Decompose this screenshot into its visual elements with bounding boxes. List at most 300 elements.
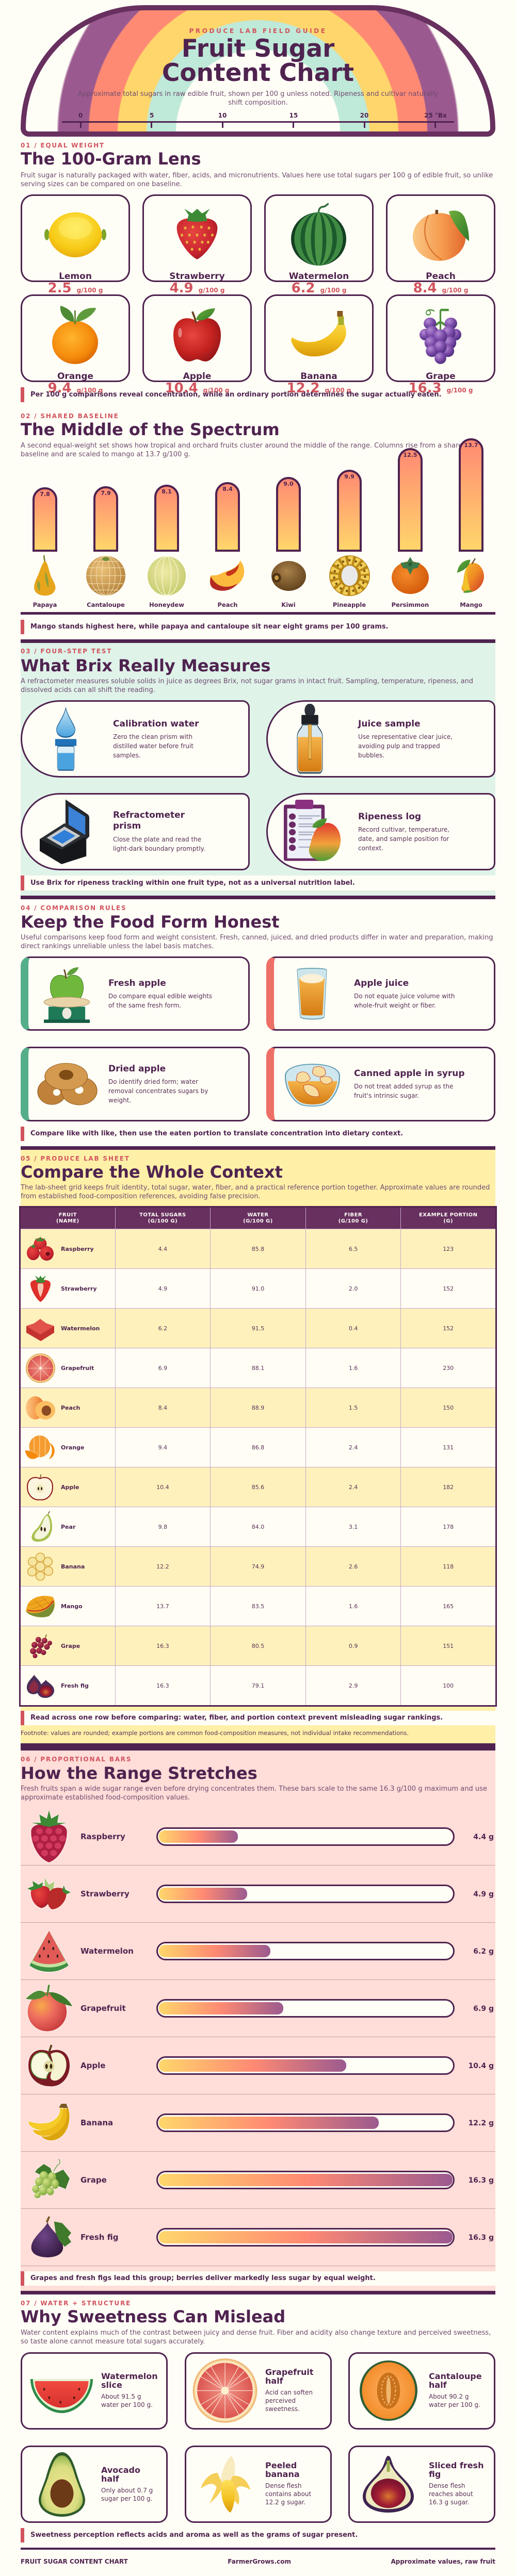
intro text: so taste alone cannot measure total sugars accurately. — [21, 2338, 205, 2346]
icon: strawberry half — [30, 1276, 51, 1302]
intro text — [21, 678, 473, 694]
label: cantaloupe: Cantaloupe — [87, 601, 125, 608]
hero subtitle — [78, 90, 438, 107]
data table: 9.8 — [158, 1523, 167, 1530]
column chart: 7.8 — [40, 491, 50, 498]
icon: persimmon — [392, 557, 429, 594]
bar row: strawberry — [21, 1865, 495, 1923]
data table: (G/100 G) — [243, 1218, 273, 1224]
step text — [358, 825, 449, 853]
label: Watermelon — [289, 271, 349, 282]
bar track — [156, 2228, 455, 2247]
icon: sliced fig — [363, 2456, 414, 2513]
icon: green grapes — [29, 2157, 70, 2198]
data table: 123 — [443, 1246, 454, 1252]
bar track — [156, 1827, 455, 1846]
bar row: watermelon — [21, 1923, 495, 1980]
card text: 16.3 g sugar. — [429, 2499, 469, 2506]
data table: Pear — [61, 1523, 75, 1530]
card: cantaloupe half — [348, 2352, 495, 2430]
label: honeydew: Honeydew — [149, 601, 184, 608]
data table: 178 — [443, 1523, 454, 1530]
column chart: 8.4 — [222, 486, 233, 492]
card title: banana — [265, 2469, 300, 2479]
fruit name: Strawberry — [80, 1889, 130, 1898]
callout: Compare like with like, then use the eaten portion to translate concentration into dietary context. — [30, 1130, 403, 1137]
fruit name: Banana — [80, 2118, 113, 2127]
value: 10.4 g — [469, 2062, 494, 2070]
icon: watermelon — [291, 203, 346, 266]
card text: contains about — [265, 2490, 311, 2498]
data table: 85.6 — [252, 1484, 264, 1490]
bar fill — [159, 1830, 238, 1843]
intro text: The lab-sheet grid keeps fruit identity, total sugar, water, fiber, and a practical reference portion together. Approximate values are rounded — [21, 1184, 490, 1192]
intro text — [21, 1183, 490, 1201]
bar fill — [159, 1945, 270, 1957]
section 4: keep the food form honest — [21, 899, 495, 1146]
data table: 6.2 — [158, 1325, 167, 1331]
section 2: the middle of the spectrum — [21, 412, 495, 634]
section eyebrow: 06 / PROPORTIONAL BARS — [21, 1756, 132, 1763]
icon: water drop and vial — [55, 706, 76, 771]
intro text: A refractometer measures soluble solids in juice as degrees Brix, not sugar grams in intact fruit. Sampling, temperature, ripeness, and — [21, 678, 473, 685]
data table: 100 — [443, 1682, 454, 1689]
step text: context. — [358, 845, 383, 852]
section eyebrow: 02 / SHARED BASELINE — [21, 412, 119, 420]
rule text — [354, 1082, 453, 1100]
callout — [21, 2528, 495, 2542]
section eyebrow: 04 / COMPARISON RULES — [21, 904, 126, 912]
card: banana — [264, 294, 374, 382]
fruit name: Grapefruit — [80, 2004, 126, 2013]
intro text — [21, 172, 493, 188]
rule text: Do identify dried form; water — [108, 1078, 198, 1085]
label: mango: Mango — [460, 601, 482, 608]
card text: reaches about — [429, 2490, 473, 2498]
card text — [101, 2392, 153, 2409]
card: fresh apple — [21, 956, 250, 1031]
card text: sweetness. — [265, 2405, 300, 2413]
section 3: what brix really measures — [21, 643, 495, 896]
step text — [358, 733, 453, 759]
icon: grapefruit — [26, 1984, 72, 2033]
step title: Ripeness log — [358, 812, 421, 822]
intro text — [21, 933, 493, 951]
intro text: dissolved acids can all shift the reading. — [21, 686, 155, 694]
data table: 6.9 — [158, 1364, 167, 1372]
icon: fig — [30, 2215, 71, 2259]
label: Peach — [426, 271, 456, 282]
heading: The Middle of the Spectrum — [21, 420, 280, 439]
card title: fig — [429, 2469, 441, 2479]
card text — [429, 2482, 473, 2506]
data table: 85.8 — [252, 1246, 264, 1252]
heading: How the Range Stretches — [21, 1763, 257, 1783]
fruit name: Grape — [80, 2175, 107, 2185]
card title: half — [265, 2376, 283, 2386]
value: 8.4 g/100 g — [413, 280, 468, 296]
step title: Calibration water — [113, 719, 199, 729]
data table: (NAME) — [56, 1218, 79, 1224]
hero subtitle: Approximate total sugars in raw edible fruit, shown per 100 g unless noted. Ripeness and cultivar naturally — [78, 90, 438, 98]
icon: peeled orange — [25, 1435, 56, 1460]
rule text: weight. — [108, 1097, 131, 1104]
step text: light-dark boundary promptly. — [113, 845, 205, 852]
step title: prism — [113, 821, 141, 831]
bar row: fresh fig — [21, 2209, 495, 2266]
step title — [113, 810, 185, 831]
footer — [21, 2557, 495, 2566]
section 7: why sweetness can mislead — [21, 2294, 495, 2548]
callout — [21, 620, 495, 634]
hero banner — [21, 5, 495, 137]
data table: 150 — [443, 1405, 454, 1411]
icon: mango half — [26, 1595, 55, 1618]
icon: banana slices — [26, 1553, 54, 1580]
step text: Use representative clear juice, — [358, 733, 453, 740]
data table: 1.5 — [349, 1405, 358, 1411]
card text — [265, 2482, 311, 2506]
column chart: 9.0 — [283, 481, 294, 487]
data table: 16.3 — [156, 1682, 169, 1689]
callout: Mango stands highest here, while papaya and cantaloupe sit near eight grams per 100 grams. — [30, 623, 389, 631]
intro text: approximate established food-composition values. — [21, 1794, 190, 1802]
data table — [19, 1206, 497, 1707]
column chart: 13.7 — [464, 442, 478, 449]
icon: avocado half — [39, 2452, 85, 2517]
icon: orange — [52, 306, 98, 364]
icon: peach slice — [209, 560, 245, 591]
card text: sugar per 100 g. — [101, 2495, 152, 2502]
card text: Acid can soften — [265, 2389, 313, 2396]
icon: lemon — [44, 212, 106, 258]
rule text: fruit's intrinsic sugar. — [354, 1092, 419, 1099]
bar track — [156, 2056, 455, 2075]
step text: bubbles. — [358, 752, 384, 759]
card title — [101, 2466, 140, 2483]
icon: apple — [173, 308, 221, 361]
intro text: Useful comparisons keep food form and weight consistent. Fresh, canned, juiced, and dried products differ in water and preparation, making — [21, 934, 493, 942]
rule text: removal concentrates sugars by — [108, 1087, 208, 1095]
rule text: whole-fruit weight or fiber. — [354, 1002, 436, 1009]
data table: 74.9 — [252, 1563, 264, 1570]
rule text — [108, 992, 212, 1010]
data table: 91.5 — [252, 1325, 264, 1331]
value: 16.3 g — [469, 2176, 494, 2185]
data table: 9.4 — [158, 1444, 167, 1451]
data table: 91.0 — [252, 1285, 264, 1292]
data table: FIBER — [344, 1212, 362, 1218]
step text — [113, 836, 205, 852]
footnote: Footnote: values are rounded; example portions are common food-composition measures, not individual intake recommendations. — [21, 1729, 409, 1737]
card: dried apple — [21, 1047, 250, 1121]
card title: Watermelon — [101, 2371, 158, 2381]
column chart: 9.9 — [344, 473, 354, 480]
card text: About 91.5 g — [101, 2393, 141, 2400]
data table: 182 — [443, 1484, 454, 1490]
data table: 2.6 — [349, 1563, 358, 1570]
hero subtitle: shift composition. — [228, 99, 288, 107]
label: Orange — [57, 371, 93, 382]
icon: cantaloupe — [86, 556, 125, 596]
heading: Why Sweetness Can Mislead — [21, 2307, 285, 2326]
label: Apple — [183, 371, 211, 382]
rule title: Apple juice — [354, 978, 409, 988]
rule title: Canned apple in syrup — [354, 1068, 465, 1079]
callout — [21, 387, 495, 402]
fruit name: Watermelon — [80, 1946, 134, 1956]
value: 16.3 g — [469, 2234, 494, 2242]
data table: Orange — [61, 1444, 84, 1451]
label: pineapple: Pineapple — [333, 601, 366, 608]
callout: Sweetness perception reflects acids and aroma as well as the grams of sugar present. — [30, 2531, 358, 2539]
value: 2.5 g/100 g — [48, 280, 103, 296]
bar fill — [159, 2174, 453, 2186]
icon: fig halves — [26, 1675, 54, 1698]
data table: 84.0 — [252, 1523, 264, 1530]
intro text: Fruit sugar is naturally packaged with water, fiber, acids, and micronutrients. Values here use total sugars per 100 g of edible fruit, so unlike — [21, 172, 493, 179]
card: apple juice — [266, 956, 495, 1031]
bar track — [156, 2171, 455, 2189]
rule text: Do compare equal edible weights — [108, 993, 212, 1000]
data table: 2.9 — [349, 1682, 358, 1689]
section eyebrow: 07 / WATER + STRUCTURE — [21, 2300, 131, 2307]
value: 9.4 g/100 g — [48, 381, 103, 396]
footer: FarmerGrows.com — [228, 2558, 291, 2565]
data table: 165 — [443, 1603, 454, 1610]
icon: apple half — [27, 1474, 53, 1501]
card text: Dense flesh — [265, 2482, 301, 2489]
data table: 118 — [443, 1563, 454, 1570]
intro text — [21, 442, 466, 458]
value: 4.4 g — [473, 1833, 494, 1841]
card: watermelon — [264, 194, 374, 282]
data table: WATER — [247, 1212, 269, 1218]
icon: watermelon cubes — [26, 1319, 54, 1341]
bar fill — [159, 2059, 346, 2072]
step text: date, and sample position for — [358, 835, 449, 843]
column chart: 8.1 — [162, 488, 172, 495]
icon: pear half — [28, 1511, 52, 1542]
heading: Compare the Whole Context — [21, 1162, 283, 1182]
card: lemon — [21, 194, 130, 282]
icon: peach halves — [26, 1396, 55, 1419]
icon: watermelon slice — [30, 2379, 93, 2413]
intro text: Fresh fruits span a wide sugar range even before drying concentrates them. These bars scale to the same 16.3 g/100 g maximum and use — [21, 1785, 487, 1793]
icon: apple on scale — [44, 967, 90, 1023]
icon: peach — [413, 210, 469, 261]
step text: Record cultivar, temperature, — [358, 826, 449, 833]
step text: Zero the clean prism with — [113, 733, 192, 740]
footer: Approximate values, raw fruit — [391, 2558, 495, 2565]
card: orange — [21, 294, 130, 382]
data table: 4.9 — [158, 1285, 167, 1292]
data table: 152 — [443, 1285, 454, 1292]
fruit name: Apple — [80, 2061, 105, 2070]
card text: About 90.2 g — [429, 2393, 469, 2400]
icon: dropper bottle — [297, 704, 323, 773]
data table: 3.1 — [349, 1523, 358, 1530]
bar fill — [159, 2117, 379, 2129]
card title — [101, 2372, 158, 2389]
title — [162, 35, 354, 87]
callout — [21, 1711, 495, 1725]
Brix scale: 10 — [218, 112, 227, 119]
bar fill — [159, 2231, 453, 2243]
icon: grape bunch — [420, 308, 461, 364]
bar row: grapefruit — [21, 1980, 495, 2037]
title: Fruit Sugar — [182, 35, 334, 63]
data table: 86.8 — [252, 1444, 264, 1451]
data table: Banana — [61, 1563, 85, 1570]
section 5: compare the whole context — [21, 1150, 495, 1743]
icon: red grapes — [28, 1634, 52, 1658]
rule text: Do not treat added syrup as the — [354, 1083, 453, 1090]
step text: samples. — [113, 752, 141, 759]
icon: strawberries — [27, 1878, 71, 1909]
card title — [265, 2368, 314, 2385]
card title: Grapefruit — [265, 2367, 314, 2377]
bar row: banana — [21, 2094, 495, 2152]
title: Content Chart — [162, 59, 354, 87]
step title: Refractometer — [113, 810, 185, 820]
Brix scale: 15 — [289, 112, 298, 119]
step text — [113, 733, 194, 759]
data table: 2.0 — [349, 1285, 358, 1292]
icon: apple half — [28, 2045, 70, 2086]
value: 6.2 g — [473, 1947, 494, 1956]
data table: Peach — [61, 1405, 80, 1411]
data table: 12.2 — [156, 1563, 169, 1570]
data table: 88.1 — [252, 1364, 264, 1372]
value: 16.3 g/100 g — [409, 381, 473, 396]
label: kiwi: Kiwi — [281, 601, 296, 608]
data table: 80.5 — [252, 1643, 264, 1649]
callout: Per 100 g comparisons reveal concentration, while an ordinary portion determines the sugar actually eaten. — [30, 391, 442, 399]
bar row: apple — [21, 2037, 495, 2094]
bar track — [156, 2113, 455, 2132]
rule text — [354, 992, 455, 1010]
column chart — [33, 438, 483, 552]
card text: perceived — [265, 2397, 296, 2404]
rule text: Do not equate juice volume with — [354, 993, 455, 1000]
intro text: baseline and are scaled to mango at 13.7 g/100 g. — [21, 451, 190, 458]
icon: raspberry — [30, 1810, 68, 1862]
icon: clipboard and mango — [284, 800, 341, 862]
data table: FRUIT — [59, 1212, 77, 1218]
Brix scale — [62, 112, 454, 128]
label: Banana — [300, 371, 337, 382]
card: apple — [142, 294, 252, 382]
bar track — [156, 1885, 455, 1903]
column chart: 7.9 — [101, 490, 111, 497]
card text: Dense flesh — [429, 2482, 465, 2489]
bar track — [156, 1942, 455, 1960]
icon: mango — [457, 558, 484, 593]
step text: avoiding pulp and trapped — [358, 742, 440, 750]
Brix scale: 0 — [78, 112, 83, 119]
data table: 6.5 — [349, 1246, 358, 1252]
card text: 12.2 g sugar. — [265, 2499, 305, 2506]
data table: 0.9 — [349, 1643, 358, 1649]
data table: EXAMPLE PORTION — [419, 1212, 477, 1218]
card: calibration water — [21, 700, 250, 778]
card title — [265, 2461, 300, 2479]
fruit name: Raspberry — [80, 1832, 125, 1841]
card text — [429, 2392, 480, 2409]
callout: Read across one row before comparing: water, fiber, and portion context prevent misleading sugar rankings. — [30, 1714, 443, 1722]
step title: Juice sample — [358, 719, 421, 729]
rule title: Fresh apple — [108, 978, 166, 988]
icon: grapefruit slice — [26, 1353, 55, 1383]
data table: 10.4 — [156, 1484, 169, 1490]
card title: Cantaloupe — [429, 2371, 482, 2381]
icon: honeydew — [148, 556, 186, 596]
data table: 2.4 — [349, 1484, 358, 1490]
card: ripeness log — [266, 793, 495, 870]
icon: peeled banana — [201, 2456, 250, 2513]
data table: Apple — [61, 1484, 79, 1490]
card title: half — [429, 2380, 447, 2390]
value: 10.4 g/100 g — [165, 381, 229, 396]
heading: What Brix Really Measures — [21, 656, 270, 675]
card: grape — [386, 294, 495, 382]
card: watermelon slice — [21, 2352, 168, 2430]
card title: Avocado — [101, 2465, 140, 2475]
data table: Fresh fig — [61, 1682, 89, 1689]
data table: 83.5 — [252, 1603, 264, 1610]
bar track — [156, 1999, 455, 2018]
card: peach — [386, 194, 495, 282]
heading: Keep the Food Form Honest — [21, 912, 280, 932]
card: juice sample — [266, 700, 495, 778]
icon: papaya — [34, 555, 56, 596]
icon: grapefruit half — [192, 2358, 257, 2423]
card title: half — [101, 2474, 119, 2484]
data table: 1.6 — [349, 1364, 358, 1372]
data table: 8.4 — [158, 1405, 167, 1411]
card: sliced fresh fig — [348, 2446, 495, 2523]
data table: 151 — [443, 1643, 454, 1649]
intro text: A second equal-weight set shows how tropical and orchard fruits cluster around the middle of the range. Columns rise from a shared — [21, 442, 466, 450]
icon: watermelon wedge — [28, 1930, 70, 1972]
step text: distilled water before fruit — [113, 742, 194, 750]
bar fill — [159, 1888, 247, 1900]
data table: Raspberry — [61, 1246, 94, 1252]
icon: refractometer — [40, 799, 89, 864]
section 1: the 100-gram lens — [21, 142, 495, 402]
card: avocado half — [21, 2446, 168, 2523]
label: Grape — [426, 371, 456, 382]
card: canned apple in syrup — [266, 1047, 495, 1121]
card: strawberry — [142, 194, 252, 282]
data table: 0.4 — [349, 1325, 358, 1331]
data table: 88.9 — [252, 1405, 264, 1411]
data table: 79.1 — [252, 1682, 264, 1689]
label: persimmon: Persimmon — [392, 601, 429, 608]
card title: Sliced fresh — [429, 2461, 483, 2470]
label: Lemon — [59, 271, 92, 282]
data table: Mango — [61, 1603, 83, 1610]
data table: 16.3 — [156, 1643, 169, 1649]
callout — [21, 2271, 495, 2286]
Brix scale: 5 — [150, 112, 154, 119]
card title — [429, 2461, 483, 2479]
value: 4.9 g/100 g — [170, 280, 224, 296]
data table: 2.4 — [349, 1444, 358, 1451]
value: 6.9 g — [473, 2005, 494, 2013]
step text: Close the plate and read the — [113, 836, 201, 843]
